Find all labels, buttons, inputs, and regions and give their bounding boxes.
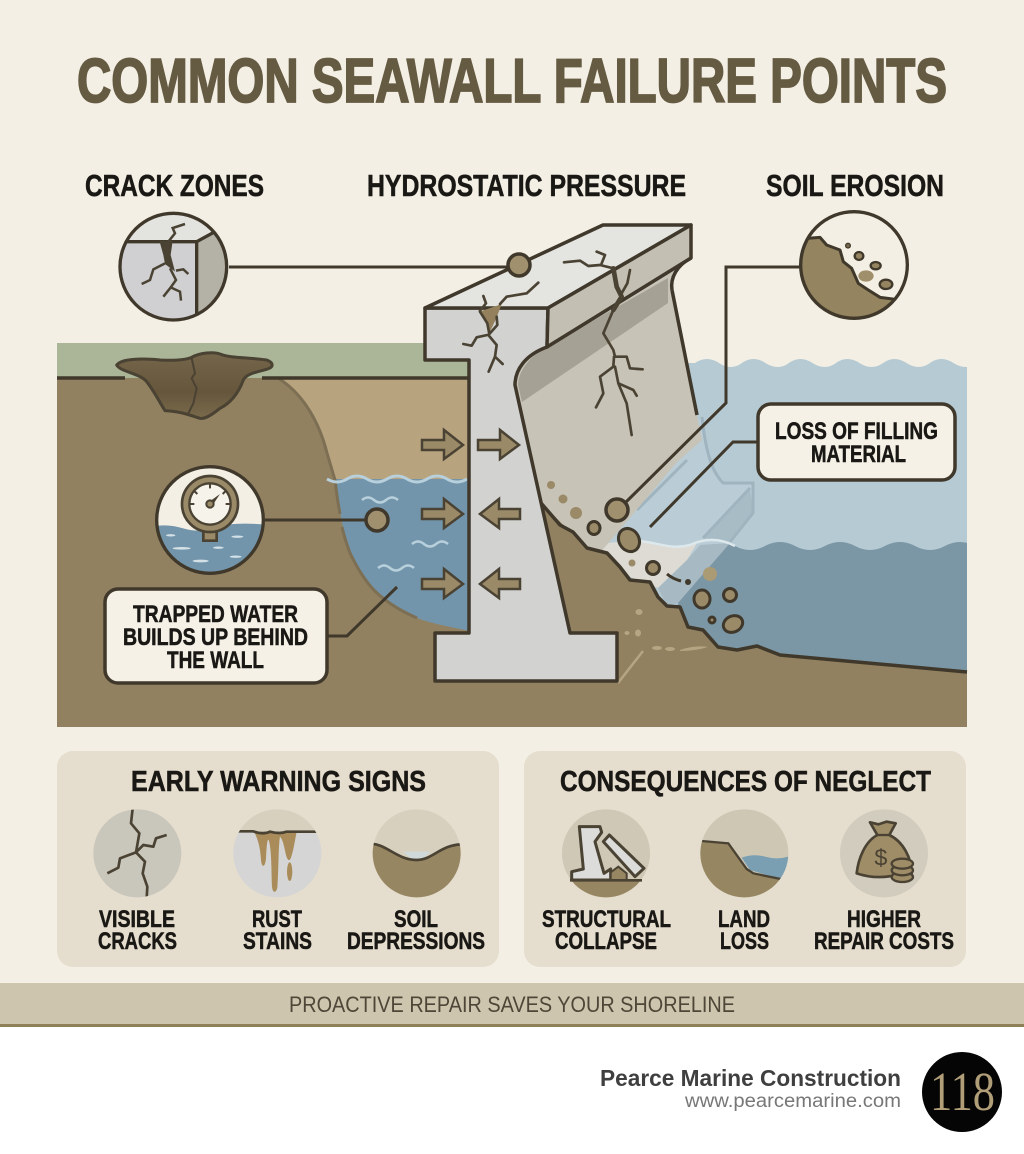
icon: structural collapse xyxy=(562,810,650,898)
ground line xyxy=(57,376,469,380)
callout: trapped water: BUILDS UP BEHIND xyxy=(123,624,308,651)
footer brand text: Pearce Marine Construction xyxy=(600,1065,901,1091)
label: visible cracks: CRACKS xyxy=(98,928,177,955)
callout: trapped water: TRAPPED WATER xyxy=(133,601,298,628)
wall back face xyxy=(515,258,702,553)
footer logo: 118 xyxy=(930,1061,995,1122)
leader lines xyxy=(229,267,800,636)
callout: loss of filling material xyxy=(758,404,955,480)
label: higher repair costs: REPAIR COSTS xyxy=(814,928,954,955)
soil ground xyxy=(57,378,564,727)
callout: loss of filling material: LOSS OF FILLING xyxy=(775,418,938,445)
icon: soil erosion circle xyxy=(799,210,909,320)
panel heading: CONSEQUENCES OF NEGLECT xyxy=(560,766,931,798)
sinkhole depression xyxy=(117,353,272,418)
wall shadow band xyxy=(518,278,668,402)
icon: pressure gauge circle xyxy=(153,467,270,580)
grass strip xyxy=(57,343,469,378)
shoreline soil slope xyxy=(470,503,967,727)
heading: hydrostatic pressure: HYDROSTATIC PRESSURE xyxy=(367,168,686,203)
label: soil depressions: DEPRESSIONS xyxy=(347,928,485,955)
callout: trapped water: THE WALL xyxy=(167,647,264,674)
label: structural collapse: COLLAPSE xyxy=(555,928,657,955)
banner: proactive repair: PROACTIVE REPAIR SAVES YOUR SHORELINE xyxy=(289,992,735,1017)
footer logo xyxy=(922,1052,1002,1132)
label: visible cracks: VISIBLE xyxy=(99,906,175,933)
label: structural collapse: STRUCTURAL xyxy=(542,906,671,933)
eroded rocks xyxy=(547,481,745,635)
callout: trapped water xyxy=(105,589,327,683)
heading: crack zones: CRACK ZONES xyxy=(85,168,264,203)
label: visible cracks xyxy=(98,906,177,955)
icon: rust stains xyxy=(230,808,327,897)
label: soil depressions: SOIL xyxy=(394,906,438,933)
wall cracks xyxy=(463,252,643,435)
icon: visible cracks xyxy=(93,808,181,898)
trapped water xyxy=(335,479,470,631)
panel: early warning signs xyxy=(57,751,499,967)
label: higher repair costs: HIGHER xyxy=(847,906,921,933)
seeping soil marks xyxy=(618,609,708,683)
heading: soil erosion: SOIL EROSION xyxy=(766,168,944,203)
label: rust stains: RUST xyxy=(252,906,302,933)
open water, deep layer xyxy=(678,542,967,670)
label: rust stains xyxy=(243,906,312,955)
label: land loss xyxy=(718,906,770,955)
submerged wall ghost xyxy=(597,417,753,606)
pressure arrows xyxy=(422,430,520,598)
open water, light layer xyxy=(630,359,967,605)
icon: soil depressions xyxy=(370,809,463,902)
icon: money bag: $ xyxy=(874,845,887,871)
icon: crack zones circle xyxy=(117,210,233,323)
label: structural collapse xyxy=(542,906,671,955)
label: rust stains: STAINS xyxy=(243,928,312,955)
panel heading: EARLY WARNING SIGNS xyxy=(131,766,426,798)
backfill soil xyxy=(278,378,470,480)
panel: consequences of neglect xyxy=(524,751,966,967)
wall top surface xyxy=(425,225,691,308)
seawall cross-section diagram xyxy=(57,225,977,727)
wall front section with footing xyxy=(425,308,617,681)
callout: loss of filling material: MATERIAL xyxy=(811,441,906,468)
label: higher repair costs xyxy=(814,906,954,955)
footer brand text xyxy=(600,1065,901,1112)
footer brand text: www.pearcemarine.com xyxy=(684,1091,901,1112)
label: soil depressions xyxy=(347,906,485,955)
label: land loss: LOSS xyxy=(720,928,769,955)
banner: proactive repair xyxy=(0,983,1024,1027)
label: land loss: LAND xyxy=(718,906,770,933)
icon: money bag xyxy=(840,809,928,897)
marker dots xyxy=(366,254,628,531)
wall cap side xyxy=(547,225,691,347)
icon: land loss xyxy=(698,809,790,902)
